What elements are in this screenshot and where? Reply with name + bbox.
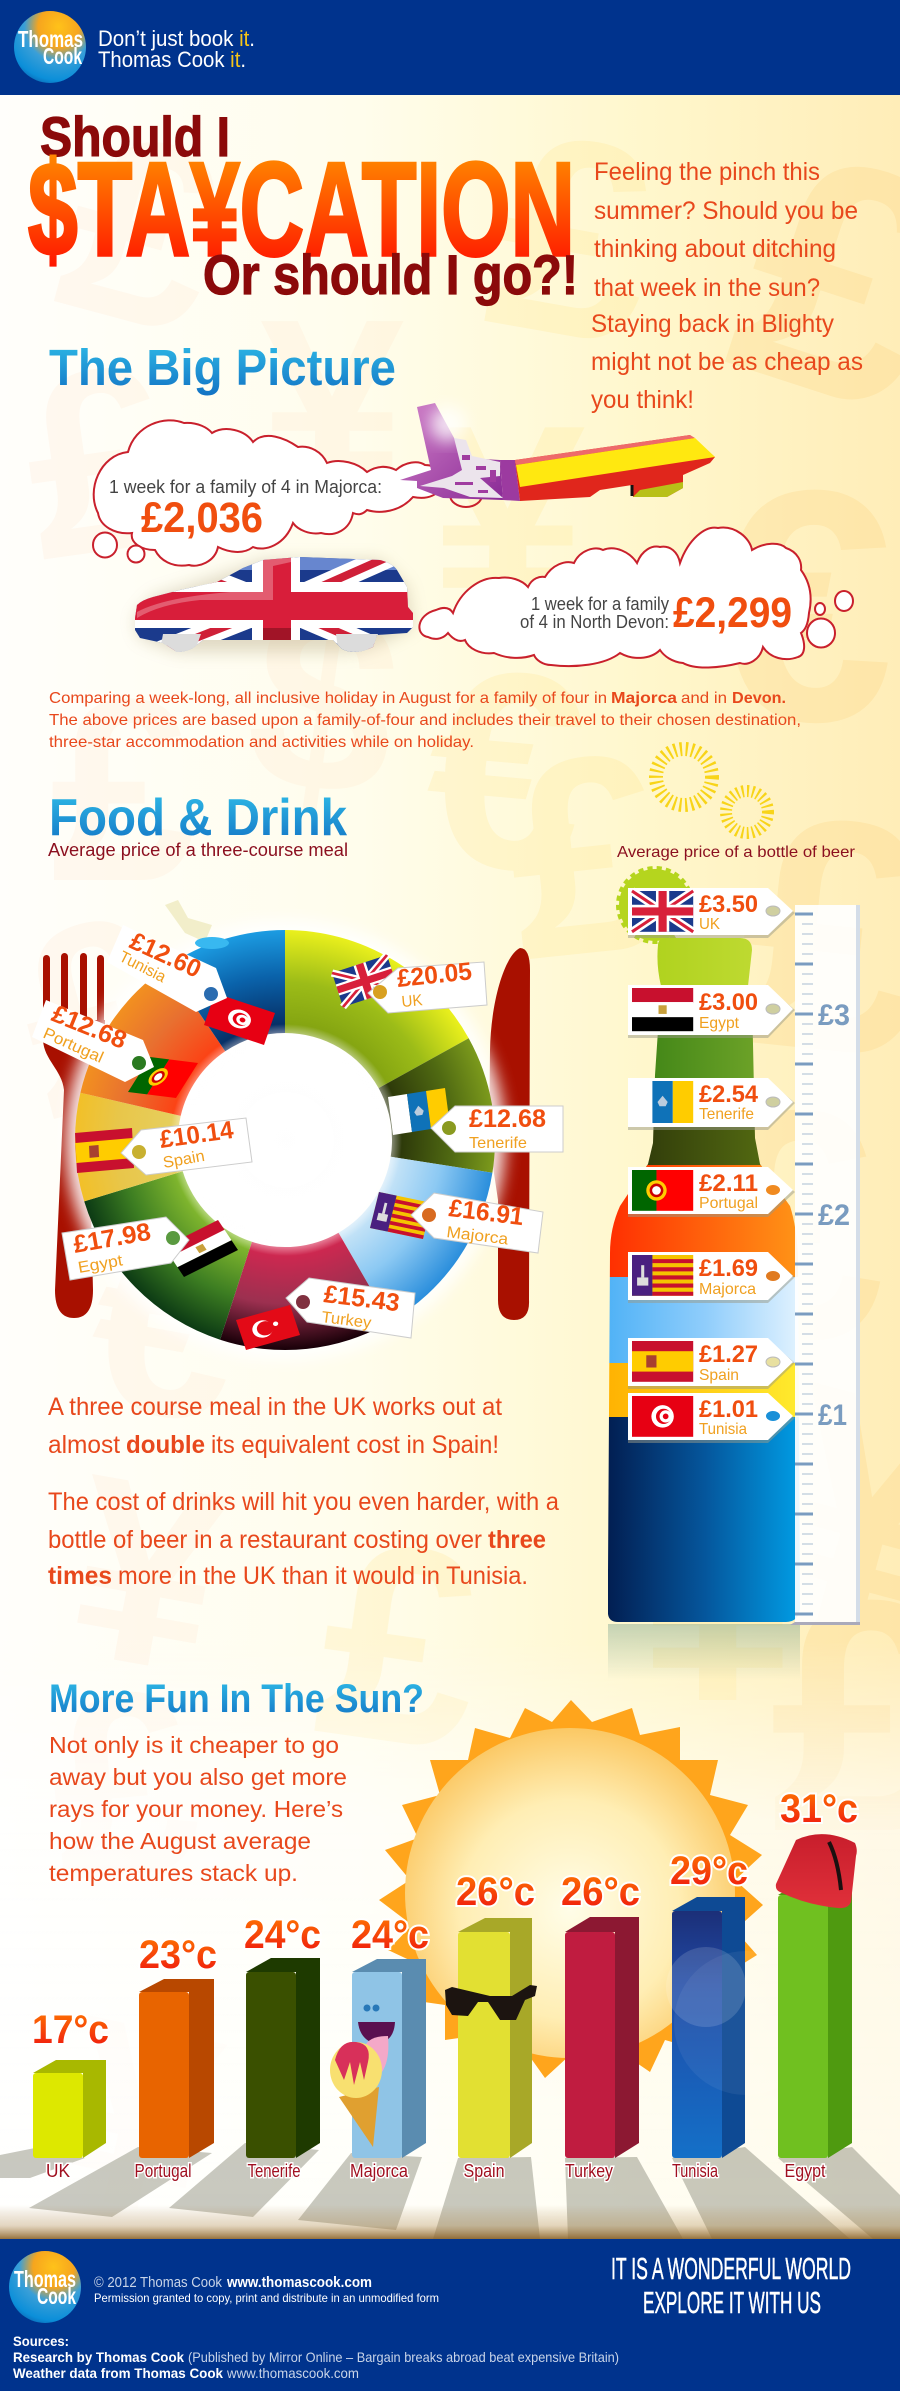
background with currency symbols: ¥ bbox=[38, 1961, 242, 2275]
sources: Weather data from Thomas Cook bbox=[13, 2365, 223, 2381]
price tag: Portugal meal bbox=[32, 1000, 198, 1098]
bar: Majorca: 24°c bbox=[351, 1913, 429, 1957]
face and ice cream bbox=[330, 2004, 395, 2147]
text: temperature intro: away but you also get more bbox=[49, 1764, 347, 1790]
bar chart: August temperatures bbox=[32, 1787, 858, 2181]
explanatory note: The above prices are based upon a family-of-four and includes their travel to their chosen destination, bbox=[49, 712, 801, 729]
background with currency symbols: £ bbox=[700, 1041, 884, 1410]
background with currency symbols: € bbox=[415, 609, 597, 933]
price tag: Turkey meal bbox=[236, 1278, 415, 1350]
title bbox=[28, 105, 578, 306]
slice: Tunisia bbox=[168, 930, 285, 1051]
sources: Research by Thomas Cook bbox=[13, 2349, 184, 2365]
footer panel bbox=[0, 2239, 900, 2391]
intro text bbox=[591, 158, 863, 414]
text: temperature intro bbox=[49, 1732, 347, 1886]
price tag: Egypt meal: £17.98 bbox=[71, 1218, 153, 1259]
text: temperature intro: Not only is it cheaper to go bbox=[49, 1732, 339, 1758]
beer tag: Tenerife: Tenerife bbox=[699, 1106, 754, 1123]
bar: Tenerife: 24°c bbox=[244, 1913, 321, 1957]
text: food comparison: almost bbox=[48, 1431, 120, 1459]
fez hat bbox=[776, 1834, 857, 1908]
price tag: UK meal: £20.05 bbox=[396, 957, 473, 993]
bar: Tunisia bbox=[666, 1849, 818, 2181]
beer tag: Spain: £1.27 bbox=[699, 1341, 758, 1368]
slice: Majorca bbox=[338, 1157, 492, 1322]
logo: Thomas Cook globe: Thomas bbox=[18, 26, 83, 52]
price tag: Spain meal: Spain bbox=[162, 1148, 206, 1172]
background with currency symbols: ¥ bbox=[50, 1420, 245, 1731]
intro text: Feeling the pinch this bbox=[594, 158, 820, 186]
text: food comparison: its equivalent cost in Spain! bbox=[211, 1431, 499, 1459]
bar: Egypt bbox=[776, 1787, 858, 2181]
text: food comparison bbox=[48, 1393, 559, 1590]
bar: Majorca: Majorca bbox=[350, 2161, 409, 2181]
beer tag: Majorca bbox=[628, 1252, 795, 1303]
sources: (Published by Mirror Online – Bargain breaks abroad beat expensive Britain) bbox=[188, 2349, 619, 2365]
beer tag: Tunisia: £1.01 bbox=[699, 1396, 758, 1423]
explanatory note: Comparing a week-long, all inclusive holiday in August for a family of four in bbox=[49, 690, 607, 707]
thought bubble: Majorca price bbox=[93, 420, 482, 566]
slogan bbox=[98, 26, 255, 72]
bar: UK: UK bbox=[46, 2161, 70, 2181]
beer tag: Majorca: Majorca bbox=[699, 1281, 756, 1298]
price tag: UK meal: UK bbox=[401, 992, 424, 1011]
illustration: sun bbox=[379, 1700, 763, 2080]
bar: Spain: 26°c bbox=[456, 1870, 535, 1914]
bar: UK: 17°c bbox=[32, 2008, 109, 2052]
beer tag: Tunisia bbox=[628, 1393, 795, 1443]
title: $TA¥CATION bbox=[28, 136, 575, 284]
ruler: £1 bbox=[818, 1399, 847, 1432]
logo: Thomas Cook globe: Cook bbox=[43, 43, 82, 69]
copyright: www.thomascook.com bbox=[226, 2274, 372, 2291]
title: Should I bbox=[40, 105, 230, 168]
slice: Turkey bbox=[220, 1233, 390, 1350]
beer tag: Spain bbox=[628, 1338, 795, 1389]
footer logo bbox=[9, 2251, 81, 2323]
bar: Spain: Spain bbox=[464, 2161, 504, 2181]
bar: Portugal: Portugal bbox=[134, 2161, 192, 2181]
slogan: Thomas Cook it. bbox=[98, 47, 246, 72]
intro text: Staying back in Blighty bbox=[591, 310, 834, 338]
bottle body colour bands bbox=[600, 930, 810, 1623]
thought bubble: North Devon price: £2,299 bbox=[673, 589, 792, 637]
slogan: Don’t just book it. bbox=[98, 26, 255, 51]
intro text: that week in the sun? bbox=[594, 274, 820, 302]
background with currency symbols: £ bbox=[494, 693, 681, 1020]
beer tag: Egypt: Egypt bbox=[699, 1015, 740, 1032]
bar: Egypt: Egypt bbox=[784, 2161, 826, 2181]
background with currency symbols: £ bbox=[36, 74, 250, 392]
slice: Egypt bbox=[84, 1171, 252, 1340]
sources: www.thomascook.com bbox=[226, 2365, 359, 2381]
explanatory note: Majorca bbox=[611, 690, 677, 707]
price tag: Portugal meal: £12.68 bbox=[48, 1000, 131, 1055]
title: Or should I go?! bbox=[203, 243, 578, 306]
intro text: summer? Should you be bbox=[594, 197, 858, 225]
bar: Tenerife bbox=[244, 1913, 321, 2181]
heading: More Fun In The Sun: More Fun In The Sun? bbox=[49, 1677, 424, 1721]
beer tag: UK: £3.50 bbox=[699, 891, 758, 918]
tagline bbox=[611, 2251, 851, 2320]
text: food comparison: bottle of beer in a restaurant costing over bbox=[48, 1526, 482, 1554]
price tag: Egypt meal bbox=[62, 1217, 238, 1280]
slice: Tenerife bbox=[379, 1038, 495, 1173]
copyright bbox=[94, 2274, 439, 2305]
beer tag: Spain: Spain bbox=[699, 1367, 739, 1384]
ground shading bbox=[0, 2205, 900, 2239]
text: food comparison: A three course meal in the UK works out at bbox=[48, 1393, 502, 1421]
beer tag: Portugal bbox=[628, 1167, 795, 1217]
subheading: beer: Average price of a bottle of beer bbox=[617, 844, 856, 861]
price tag: Majorca meal: £16.91 bbox=[447, 1194, 525, 1231]
background with currency symbols: ¥ bbox=[430, 368, 588, 680]
thought bubble: Majorca price: £2,036 bbox=[141, 494, 263, 542]
explanatory note: three-star accommodation and activities while on holiday. bbox=[49, 734, 474, 751]
beer tag: Egypt bbox=[628, 985, 795, 1038]
text: food comparison: more in the UK than it would in Tunisia. bbox=[118, 1562, 528, 1590]
background with currency symbols: £ bbox=[50, 646, 195, 936]
explanatory note: Devon. bbox=[732, 690, 786, 707]
text: food comparison: three bbox=[488, 1526, 546, 1554]
bar: Majorca bbox=[330, 1913, 429, 2181]
bottle cap bbox=[619, 869, 691, 941]
price tag: Tenerife meal: £12.68 bbox=[469, 1105, 546, 1133]
sources bbox=[13, 2333, 619, 2381]
price tag: Majorca meal bbox=[370, 1192, 543, 1253]
beer tag: Portugal: Portugal bbox=[699, 1195, 758, 1212]
price tag: Spain meal bbox=[75, 1116, 252, 1175]
background with currency symbols: € bbox=[70, 1170, 263, 1480]
thought bubble: North Devon price bbox=[419, 528, 853, 668]
copyright: © 2012 Thomas Cook bbox=[94, 2274, 222, 2291]
slice: Portugal bbox=[80, 966, 225, 1116]
bar shadows bbox=[0, 2143, 900, 2239]
footer logo: Thomas bbox=[14, 2266, 76, 2292]
icon: knife bbox=[489, 948, 530, 1320]
price tag: Turkey meal: £15.43 bbox=[322, 1280, 401, 1317]
bar: Turkey: Turkey bbox=[565, 2161, 613, 2181]
bar: Tunisia: 29°c bbox=[670, 1849, 748, 1893]
bar: Turkey bbox=[561, 1870, 640, 2181]
bottle reflection bbox=[608, 1624, 800, 1680]
background with currency symbols: £ bbox=[7, 308, 191, 615]
chart: beer bottle bbox=[600, 869, 860, 1680]
slice: UK bbox=[285, 930, 469, 1088]
explanatory note: and in bbox=[681, 690, 727, 707]
price tag: Turkey meal: Turkey bbox=[321, 1309, 372, 1332]
background with currency symbols: $ bbox=[232, 548, 416, 856]
beer tag: UK: UK bbox=[699, 916, 720, 933]
thought bubble: Majorca price: 1 week for a family of 4 in Majorca: bbox=[109, 477, 382, 497]
price tag: UK meal bbox=[332, 955, 487, 1013]
price tag: Portugal meal: Portugal bbox=[40, 1025, 106, 1067]
intro text: thinking about ditching bbox=[594, 235, 836, 263]
plane illustration bbox=[400, 403, 715, 501]
ruler: £2 bbox=[818, 1199, 850, 1232]
beer tag: Tenerife bbox=[628, 1078, 795, 1130]
background with currency symbols: ¥ bbox=[260, 266, 406, 556]
footer logo: Cook bbox=[37, 2283, 76, 2309]
background with currency symbols: £ bbox=[40, 1634, 209, 1936]
price tag: Tunisia meal bbox=[107, 925, 275, 1045]
logo: Thomas Cook globe bbox=[14, 11, 86, 83]
price tag: Tenerife meal: Tenerife bbox=[469, 1135, 527, 1152]
sunglasses bbox=[445, 1985, 537, 2020]
bar: Portugal: 23°c bbox=[139, 1933, 217, 1977]
explanatory note bbox=[49, 690, 801, 751]
bar: Spain bbox=[445, 1870, 537, 2181]
background with currency symbols: ¥ bbox=[640, 1448, 798, 1760]
copyright: Permission granted to copy, print and distribute in an unmodified form bbox=[94, 2291, 439, 2305]
price tag: Tunisia meal: £12.60 bbox=[126, 927, 205, 984]
background with currency symbols: € bbox=[710, 421, 894, 790]
text: temperature intro: how the August average bbox=[49, 1828, 311, 1854]
beer tag: Egypt: £3.00 bbox=[699, 989, 758, 1016]
price tag: Tenerife meal bbox=[388, 1088, 563, 1152]
text: food comparison: The cost of drinks will hit you even harder, with a bbox=[48, 1488, 559, 1516]
price tag: Spain meal: £10.14 bbox=[158, 1116, 235, 1154]
bar: Tunisia: Tunisia bbox=[672, 2161, 719, 2181]
icon: pale ship detail on plate bbox=[165, 900, 229, 949]
car illustration bbox=[130, 552, 418, 660]
icon: fork bbox=[43, 953, 105, 1318]
text: temperature intro: rays for your money. Here’s bbox=[49, 1796, 343, 1822]
beer tag: UK bbox=[628, 888, 795, 938]
bar: Portugal bbox=[134, 1933, 217, 2181]
intro text: might not be as cheap as bbox=[591, 348, 863, 376]
bar: Tenerife: Tenerife bbox=[248, 2161, 300, 2181]
price tag: Tunisia meal: Tunisia bbox=[116, 948, 169, 986]
header bar bbox=[0, 0, 900, 95]
slice: Spain bbox=[75, 1093, 183, 1201]
intro text: you think! bbox=[591, 386, 694, 414]
text: temperature intro: temperatures stack up. bbox=[49, 1860, 298, 1886]
background with currency symbols: £ bbox=[470, 72, 677, 406]
sources: Sources: bbox=[13, 2333, 69, 2349]
beer tag: Tenerife: £2.54 bbox=[699, 1081, 759, 1108]
bar: Turkey: 26°c bbox=[561, 1870, 640, 1914]
heading: The Big Picture: The Big Picture bbox=[49, 339, 396, 396]
bar: Egypt: 31°c bbox=[780, 1787, 858, 1831]
text: food comparison: double bbox=[126, 1431, 205, 1459]
heading: Food & Drink: Food & Drink bbox=[49, 789, 347, 847]
icon: small suns bbox=[656, 749, 768, 833]
ruler bbox=[790, 905, 860, 1625]
thought bubble: North Devon price: 1 week for a family bbox=[531, 594, 669, 614]
text: food comparison: times bbox=[48, 1562, 112, 1590]
bar: UK bbox=[32, 2008, 109, 2181]
price tag: Majorca meal: Majorca bbox=[446, 1224, 509, 1249]
subheading: meal: Average price of a three-course meal bbox=[48, 840, 348, 860]
background with currency symbols: £ bbox=[302, 1480, 499, 1811]
thought bubble: North Devon price: of 4 in North Devon: bbox=[520, 612, 669, 632]
donut chart: meal prices bbox=[65, 920, 505, 1360]
beer tag: Tunisia: Tunisia bbox=[699, 1421, 747, 1438]
price tag: Egypt meal: Egypt bbox=[77, 1252, 125, 1277]
ruler: £3 bbox=[818, 999, 850, 1032]
beer tag: Portugal: £2.11 bbox=[699, 1170, 758, 1197]
beer tag: Majorca: £1.69 bbox=[699, 1255, 758, 1282]
